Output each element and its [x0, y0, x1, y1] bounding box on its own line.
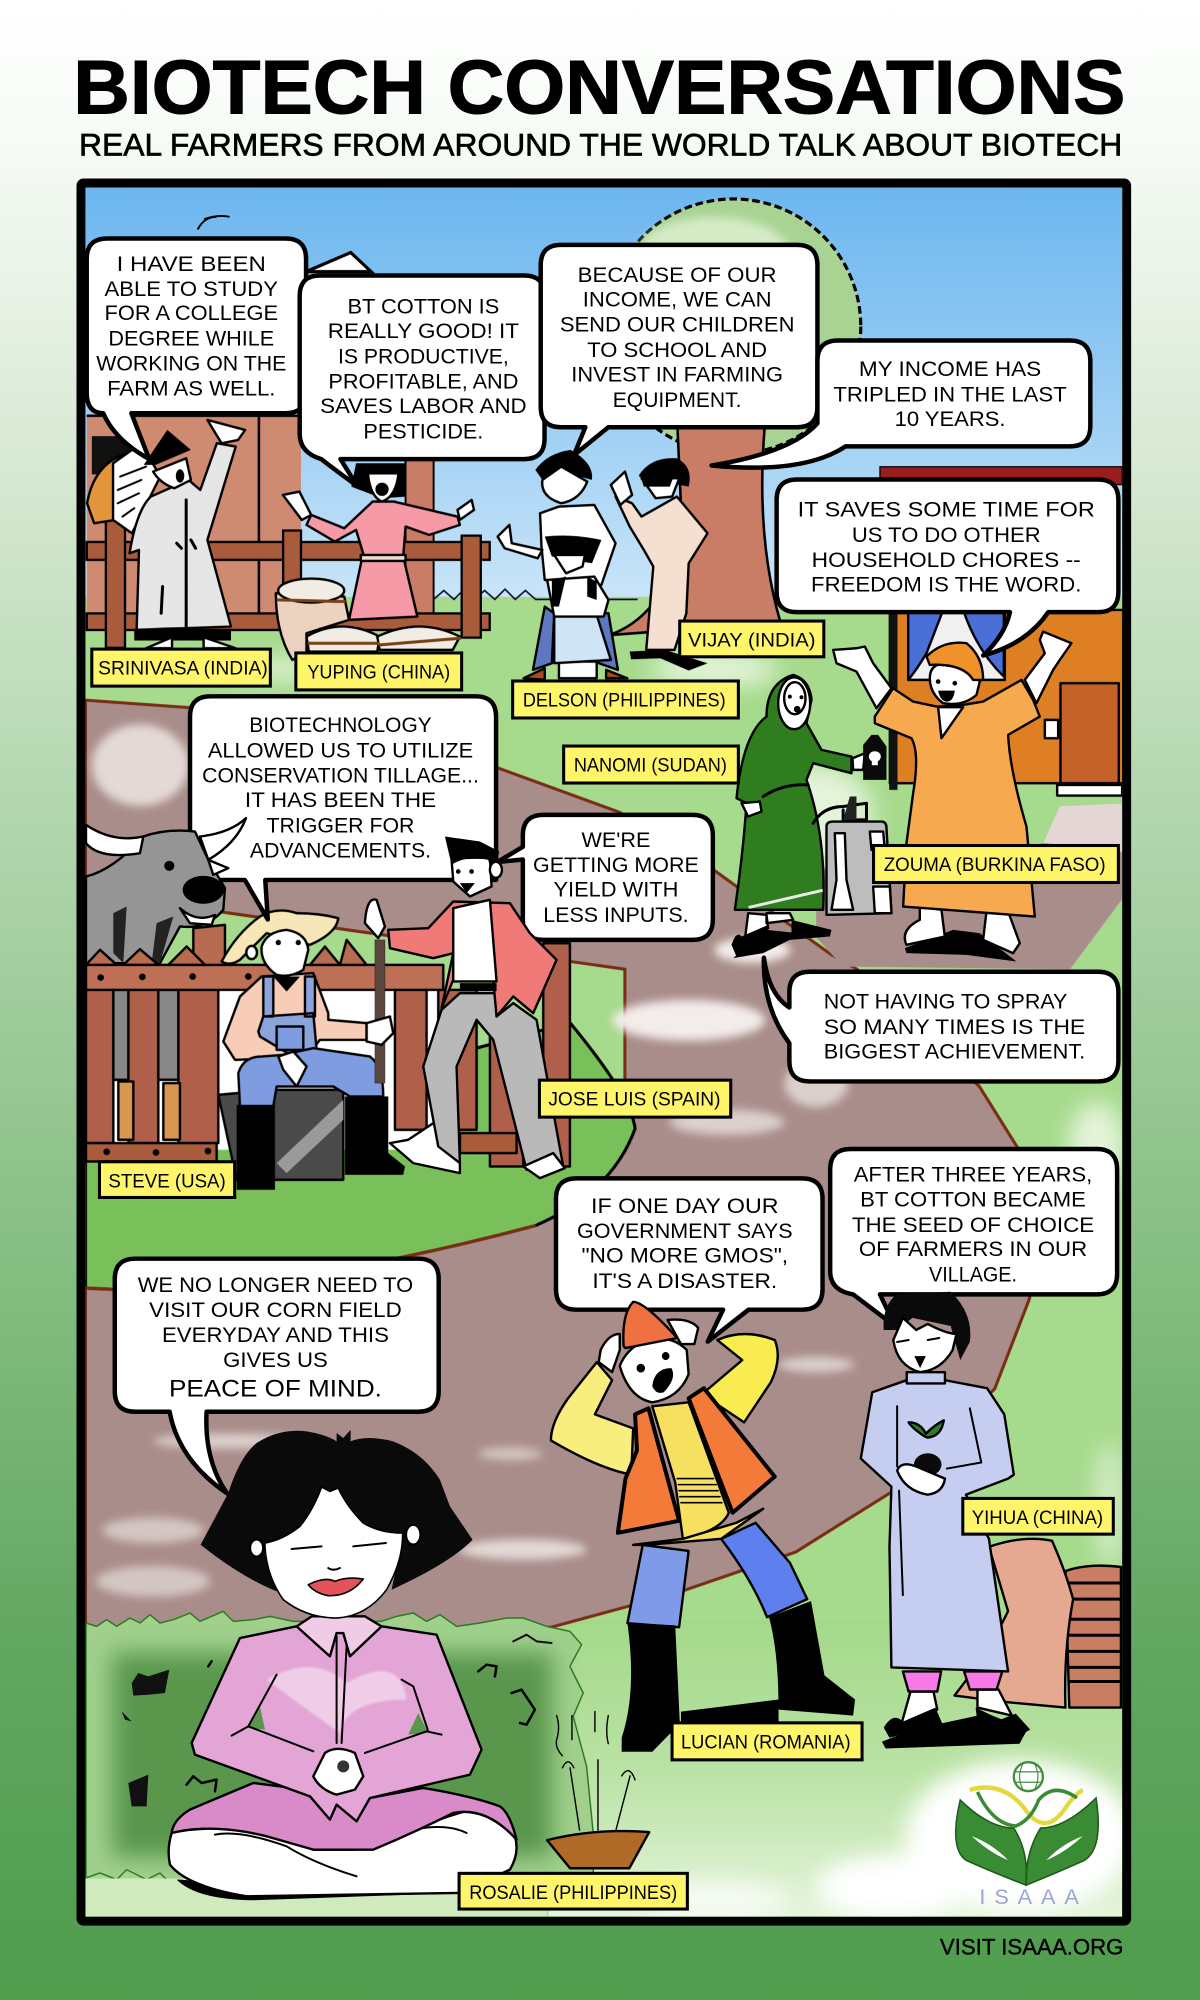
bubble: Lucian	[556, 1178, 823, 1342]
bubble: Jose Luis	[497, 815, 713, 940]
bubble: Steve: CONSERVATION TILLAGE...	[202, 765, 479, 788]
grain sacks	[955, 1539, 1121, 1708]
bubble: Jose Luis: LESS INPUTS.	[543, 904, 689, 927]
figure: Vijay	[611, 458, 708, 671]
title: BIOTECH CONVERSATIONS	[73, 46, 1125, 131]
label: Yihua: YIHUA (CHINA)	[972, 1508, 1103, 1529]
bubble: Lucian: IT'S A DISASTER.	[592, 1270, 777, 1293]
label: Delson: DELSON (PHILIPPINES)	[523, 691, 726, 712]
bubble: Jose Luis: WE'RE	[582, 829, 650, 852]
label: Steve: STEVE (USA)	[108, 1171, 226, 1192]
garden shrub marks	[122, 1635, 552, 1806]
label: Nanomi: NANOMI (SUDAN)	[574, 756, 727, 777]
figure: Zouma	[833, 632, 1071, 962]
tree crown texture	[636, 212, 791, 243]
barn roof	[306, 253, 371, 272]
bubble: Srinivasa: DEGREE WHILE	[108, 328, 274, 351]
bubble: Yuping	[300, 275, 545, 486]
barn post	[406, 459, 434, 622]
barn wall	[87, 414, 301, 625]
subtitle: REAL FARMERS FROM AROUND THE WORLD TALK ABOUT BIOTECH	[79, 128, 1122, 163]
label: Jose Luis: JOSE LUIS (SPAIN)	[548, 1090, 721, 1111]
barn opening	[92, 436, 130, 474]
label: Zouma	[874, 846, 1118, 882]
bubble: Steve: TRIGGER FOR	[267, 814, 414, 837]
ground mottling	[204, 652, 1125, 1194]
figure: Rosalie	[169, 1430, 517, 1900]
crate	[218, 1090, 343, 1180]
bubble: Nanomi: SO MANY TIMES IS THE	[824, 1016, 1085, 1039]
figure: Yuping	[283, 463, 474, 620]
bubble: Steve: ALLOWED US TO UTILIZE	[208, 740, 473, 763]
bubble: Srinivasa: WORKING ON THE	[96, 352, 286, 375]
bubble: Delson: INVEST IN FARMING	[571, 363, 783, 386]
bubble: Yihua	[830, 1149, 1117, 1326]
bubble: Zouma: IT SAVES SOME TIME FOR	[798, 498, 1095, 521]
bubble: Srinivasa	[87, 238, 306, 459]
bubble: Lucian: GOVERNMENT SAYS	[577, 1220, 793, 1243]
bubble: Delson: INCOME, WE CAN	[583, 289, 772, 312]
bubble: Srinivasa: FARM AS WELL.	[107, 377, 275, 400]
logo globe lines	[1015, 1763, 1042, 1790]
logo helix green	[977, 1790, 1077, 1826]
bubble: Yihua: VILLAGE.	[929, 1264, 1017, 1287]
logo leaves	[956, 1798, 1098, 1885]
bubble: Srinivasa: I HAVE BEEN	[117, 253, 266, 276]
label: Delson	[513, 681, 738, 718]
bubble: Zouma: HOUSEHOLD CHORES --	[812, 549, 1081, 572]
bubble: Yihua: OF FARMERS IN OUR	[859, 1238, 1087, 1261]
bubble: Rosalie: WE NO LONGER NEED TO	[138, 1274, 413, 1297]
bubble: Rosalie	[115, 1259, 439, 1493]
label: Srinivasa: SRINIVASA (INDIA)	[98, 659, 268, 680]
bubble: Rosalie: PEACE OF MIND.	[169, 1375, 382, 1402]
bubble: Lucian: IF ONE DAY OUR	[591, 1195, 779, 1218]
bubble: Steve: BIOTECHNOLOGY	[249, 714, 432, 737]
label: Vijay	[680, 621, 824, 657]
grass horizon	[434, 589, 638, 599]
barn beam	[87, 416, 301, 615]
logo name: ISAAA	[979, 1884, 1079, 1909]
bubble: Zouma: FREEDOM IS THE WORD.	[811, 574, 1081, 597]
label: Vijay: VIJAY (INDIA)	[688, 631, 816, 652]
bubble: Rosalie: GIVES US	[223, 1349, 328, 1372]
figure: Steve	[222, 910, 405, 1190]
label: Yuping	[296, 653, 462, 690]
bubble: Yuping: PROFITABLE, AND	[328, 370, 518, 393]
bubble: Rosalie: VISIT OUR CORN FIELD	[149, 1299, 402, 1322]
bubble: Yuping: PESTICIDE.	[363, 421, 483, 444]
bubble: Lucian: "NO MORE GMOS",	[582, 1245, 788, 1268]
label: Lucian	[672, 1723, 862, 1760]
bubble: Yuping: SAVES LABOR AND	[320, 395, 527, 418]
house wall and door, window	[889, 610, 1123, 796]
bubble: Vijay: MY INCOME HAS	[859, 358, 1041, 381]
knoll lower red edge	[85, 1226, 536, 1290]
tree trunk	[610, 421, 780, 635]
label: Jose Luis	[539, 1080, 731, 1117]
bubble: Steve	[190, 696, 496, 919]
figure: Nanomi	[732, 675, 886, 958]
panel: comic scene	[85, 187, 1135, 1921]
logo vein highlights	[972, 1836, 1083, 1860]
garden dark interior	[112, 1653, 552, 1857]
speech bubbles	[87, 238, 1118, 1493]
bubble: Vijay	[712, 341, 1090, 468]
sprayer	[813, 797, 891, 915]
figure: Srinivasa	[87, 420, 245, 648]
bubble: Steve: ADVANCEMENTS.	[250, 839, 431, 862]
label: Zouma: ZOUMA (BURKINA FASO)	[884, 855, 1106, 876]
label: Srinivasa	[92, 649, 270, 686]
green knoll under Steve	[85, 1023, 635, 1290]
bubble: Srinivasa: ABLE TO STUDY	[105, 278, 278, 301]
farm fence	[87, 520, 490, 648]
bubble: Delson	[541, 245, 817, 455]
ground: light green	[85, 597, 1122, 1917]
panel frame	[81, 183, 1127, 1921]
incense bowl and smoke	[547, 1712, 649, 1868]
figure: Jose Luis	[365, 837, 565, 1178]
bubble: Steve: IT HAS BEEN THE	[245, 789, 436, 812]
bubble: Zouma	[777, 480, 1118, 655]
bubble: Srinivasa: FOR A COLLEGE	[105, 302, 278, 325]
bubble: Delson: BECAUSE OF OUR	[578, 264, 777, 287]
brown path	[85, 700, 1035, 1639]
name labels	[92, 621, 1118, 1909]
bubble: Yuping: BT COTTON IS	[348, 296, 499, 319]
house roof	[880, 467, 1122, 485]
tree crown	[637, 197, 862, 451]
water buffalo	[86, 818, 246, 965]
fence behind Steve	[86, 925, 570, 1166]
label: Lucian: LUCIAN (ROMANIA)	[681, 1732, 851, 1753]
lower right ground	[548, 1677, 1122, 1917]
path lighter mottling	[92, 724, 854, 1597]
bubble: Zouma: US TO DO OTHER	[852, 524, 1041, 547]
label: Steve	[99, 1162, 235, 1197]
bubble: Yuping: IS PRODUCTIVE,	[338, 345, 509, 368]
bubble: Delson: TO SCHOOL AND	[587, 339, 767, 362]
bubble: Nanomi: BIGGEST ACHIEVEMENT.	[824, 1040, 1085, 1063]
logo: ISAAA	[956, 1762, 1098, 1885]
label: Nanomi	[564, 746, 738, 783]
label: Rosalie: ROSALIE (PHILIPPINES)	[469, 1883, 677, 1904]
logo globe	[1014, 1762, 1043, 1791]
label: Yihua	[963, 1498, 1113, 1534]
figure: Yihua	[861, 1292, 1030, 1749]
bubble: Rosalie: EVERYDAY AND THIS	[162, 1324, 389, 1347]
bubble: Vijay: 10 YEARS.	[895, 408, 1006, 431]
bubble: Yuping: REALLY GOOD! IT	[328, 320, 519, 343]
bubble: Nanomi	[764, 958, 1118, 1081]
label: Rosalie	[459, 1873, 687, 1909]
logo helix	[970, 1788, 1083, 1823]
bubble: Yihua: BT COTTON BECAME	[860, 1188, 1086, 1211]
bubble: Nanomi: NOT HAVING TO SPRAY	[824, 991, 1067, 1014]
bubble: Vijay: TRIPLED IN THE LAST	[833, 384, 1067, 407]
bird	[198, 216, 230, 230]
figure: Delson with child	[498, 450, 627, 680]
label: Yuping: YUPING (CHINA)	[307, 662, 450, 683]
grain baskets	[276, 579, 460, 660]
garden bottom strip	[85, 1878, 547, 1917]
bubble: Delson: EQUIPMENT.	[613, 389, 742, 412]
garden under Rosalie	[86, 1611, 593, 1880]
bubble: Jose Luis: YIELD WITH	[553, 879, 678, 902]
bubble: Delson: SEND OUR CHILDREN	[560, 314, 794, 337]
path right of Zouma	[816, 803, 1122, 969]
sky	[85, 187, 1122, 621]
bubble: Yihua: THE SEED OF CHOICE	[852, 1214, 1094, 1237]
footer: visit link: VISIT ISAAA.ORG	[940, 1934, 1123, 1959]
bubble: Jose Luis: GETTING MORE	[533, 854, 699, 877]
bubble: Yihua: AFTER THREE YEARS,	[854, 1164, 1092, 1187]
lower ground white mottling	[638, 1441, 1135, 1921]
figure: Lucian	[551, 1302, 855, 1752]
path light patch near door	[1043, 803, 1122, 852]
